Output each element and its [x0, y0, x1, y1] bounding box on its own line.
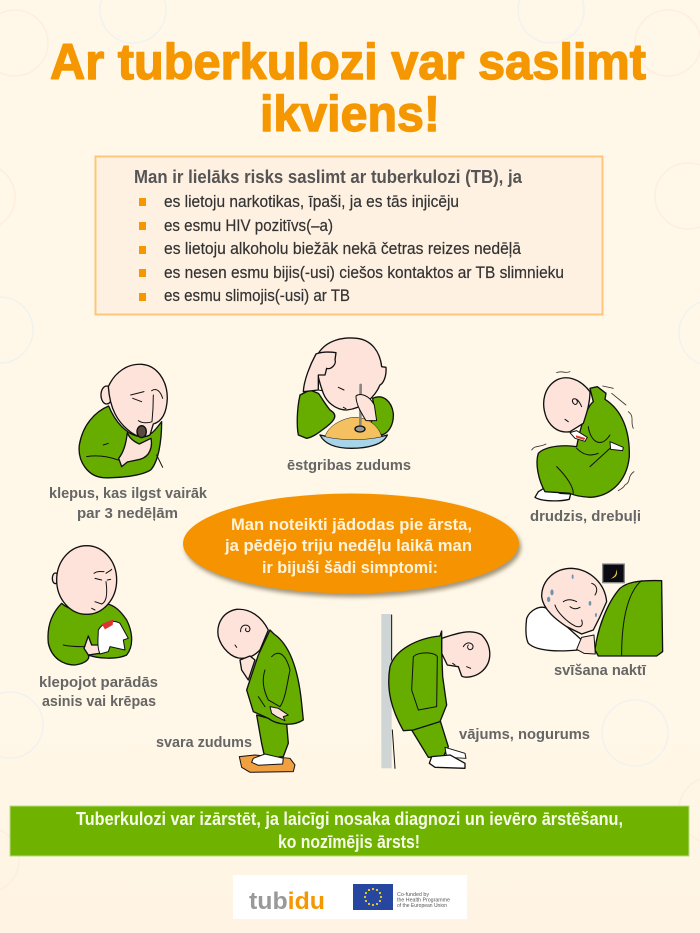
icon: weak man leaning on wall	[381, 614, 490, 768]
title: Ar tuberkulozi var saslimt	[50, 34, 646, 90]
icon: man coughing blood	[48, 546, 132, 665]
risk item 1: es lietoju narkotikas, īpaši, ja es tās injicēju	[164, 193, 459, 211]
risk heading: Man ir lielāks risks saslimt ar tuberkulozi (TB), ja	[134, 167, 523, 187]
label: fever: drudzis, drebuļi	[530, 509, 641, 525]
label: appetite loss: ēstgribas zudums	[287, 458, 411, 474]
risk item 3: es lietoju alkoholu biežāk nekā četras reizes nedēļā	[164, 240, 522, 258]
icon: man coughing	[79, 364, 167, 478]
logo: EU flag	[353, 884, 393, 910]
risk item 2: es esmu HIV pozitīvs(–a)	[164, 217, 333, 235]
EU co-funding note: Co-funded by	[397, 892, 430, 898]
label: blood in cough	[39, 675, 158, 710]
risk item 4: es nesen esmu bijis(-usi) ciešos kontaktos ar TB slimnieku	[164, 264, 564, 282]
title	[50, 34, 646, 142]
banner: treatment message: ko nozīmējis ārsts!	[278, 832, 420, 852]
label: cough	[49, 486, 208, 522]
banner: treatment message	[10, 806, 689, 856]
callout: see a doctor: Man noteikti jādodas pie ārsta,	[231, 515, 472, 534]
label: cough: klepus, kas ilgst vairāk	[49, 486, 208, 502]
icon: night window	[603, 564, 624, 583]
logo: tubidu: tubidu	[249, 888, 325, 915]
title: ikviens!	[260, 86, 440, 142]
label: night sweats: svīšana naktī	[554, 663, 647, 679]
logos	[233, 875, 467, 919]
label: weakness: vājums, nogurums	[459, 727, 590, 743]
callout: see a doctor: ir bijuši šādi simptomi:	[262, 558, 438, 577]
icon: man with fever	[532, 372, 634, 501]
icon: man sweating in bed	[526, 564, 663, 656]
label: blood in cough: klepojot parādās	[39, 675, 158, 691]
icon: man on scale	[218, 609, 303, 772]
label: blood in cough: asinis vai krēpas	[42, 694, 156, 710]
label: weight loss: svara zudums	[156, 735, 252, 751]
EU co-funding note	[397, 892, 450, 909]
callout: see a doctor	[183, 494, 521, 597]
label: cough: par 3 nedēļām	[77, 506, 178, 522]
icon: man without appetite	[297, 338, 393, 448]
callout: see a doctor: ja pēdējo triju nedēļu laikā man	[224, 536, 472, 555]
risk item 5: es esmu slimojis(-usi) ar TB	[164, 287, 350, 305]
EU co-funding note: of the European Union	[397, 903, 447, 909]
panel: risk factors	[96, 156, 602, 314]
EU co-funding note: the Health Programme	[397, 898, 450, 904]
banner: treatment message: Tuberkulozi var izārstēt, ja laicīgi nosaka diagnozi un ievēro ārstēšanu,	[76, 809, 623, 829]
